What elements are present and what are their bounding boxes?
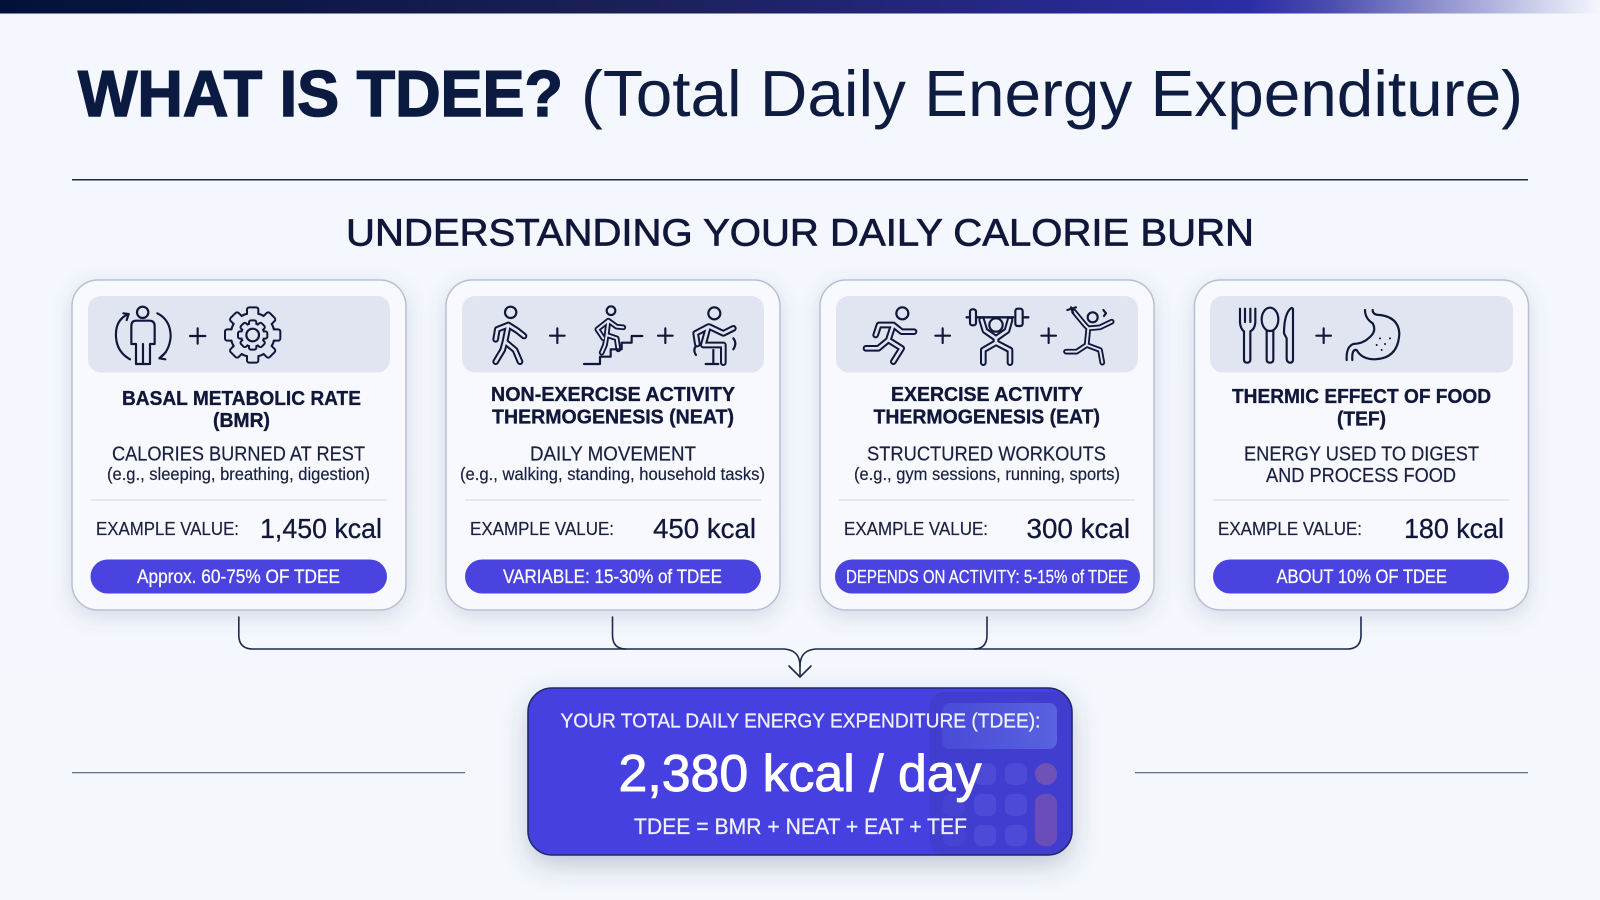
heading: EAT: THERMOGENESIS (EAT) xyxy=(874,406,1100,428)
panel: EAT xyxy=(820,280,1154,610)
panel: TEF xyxy=(1194,280,1528,610)
example value: TEF: EXAMPLE VALUE: xyxy=(1218,519,1362,539)
example value: NEAT: EXAMPLE VALUE: xyxy=(470,519,614,539)
badge: BMR share xyxy=(90,560,387,594)
example value: BMR: 1,450 kcal xyxy=(260,513,382,544)
panel: NEAT xyxy=(446,280,780,610)
heading: NEAT xyxy=(491,383,735,428)
example value: TEF: 180 kcal xyxy=(1404,513,1504,544)
description: NEAT xyxy=(460,444,765,484)
panel: TDEE total xyxy=(528,688,1072,855)
example value: BMR xyxy=(96,513,382,544)
icon: running, weightlifting and jumping xyxy=(866,307,1112,363)
badge: NEAT share xyxy=(465,560,761,594)
title: (Total Daily Energy Expenditure) xyxy=(581,57,1523,130)
description: NEAT: DAILY MOVEMENT xyxy=(530,444,696,466)
description: BMR: (e.g., sleeping, breathing, digestion) xyxy=(107,464,370,484)
arrow: connector merging cards into total xyxy=(239,617,1361,677)
badge: EAT share xyxy=(835,560,1140,594)
description: NEAT: (e.g., walking, standing, household tasks) xyxy=(460,464,765,484)
example value: EAT: 300 kcal xyxy=(1026,513,1130,544)
description: EAT xyxy=(854,444,1120,484)
description: EAT: (e.g., gym sessions, running, sports) xyxy=(854,464,1120,484)
heading: NEAT: THERMOGENESIS (NEAT) xyxy=(492,406,734,428)
example value: NEAT xyxy=(470,513,756,544)
panel: BMR xyxy=(72,280,406,610)
description: BMR: CALORIES BURNED AT REST xyxy=(112,444,365,466)
heading: BMR: (BMR) xyxy=(213,409,270,432)
badge: EAT share: DEPENDS ON ACTIVITY: 5-15% of TDEE xyxy=(846,567,1128,587)
description: TEF: AND PROCESS FOOD xyxy=(1266,465,1456,487)
title xyxy=(78,57,1523,130)
heading: NEAT: NON-EXERCISE ACTIVITY xyxy=(491,383,735,406)
description: EAT: STRUCTURED WORKOUTS xyxy=(867,444,1106,466)
badge: BMR share: Approx. 60-75% OF TDEE xyxy=(137,566,340,588)
formula: TDEE = BMR + NEAT + EAT + TEF xyxy=(634,814,967,839)
example value: EAT xyxy=(844,513,1130,544)
heading: BMR: BASAL METABOLIC RATE xyxy=(122,387,361,410)
example value: NEAT: 450 kcal xyxy=(653,513,756,544)
heading: BMR xyxy=(122,387,361,432)
icon: walking, stairs and standing up xyxy=(496,306,735,364)
heading: TEF: THERMIC EFFECT OF FOOD xyxy=(1232,385,1491,408)
icon: faded calculator xyxy=(930,692,1072,855)
heading: TEF: (TEF) xyxy=(1337,408,1386,430)
total value: 2,380 kcal / day xyxy=(618,745,982,803)
description: TEF xyxy=(1244,444,1479,487)
badge: TEF share: ABOUT 10% OF TDEE xyxy=(1276,566,1447,588)
example value: TEF xyxy=(1218,513,1504,544)
badge: TEF share xyxy=(1213,560,1509,594)
heading: EAT xyxy=(874,383,1100,428)
badge: NEAT share: VARIABLE: 15-30% of TDEE xyxy=(503,566,722,588)
description: TEF: ENERGY USED TO DIGEST xyxy=(1244,444,1479,466)
example value: BMR: EXAMPLE VALUE: xyxy=(96,519,239,539)
top gradient bar xyxy=(0,0,1600,14)
heading: EAT: EXERCISE ACTIVITY xyxy=(891,383,1083,406)
description: BMR xyxy=(107,444,370,484)
icon: person and metabolism xyxy=(116,307,279,364)
subtitle: UNDERSTANDING YOUR DAILY CALORIE BURN xyxy=(346,212,1254,254)
heading: TEF xyxy=(1232,385,1491,430)
total label: YOUR TOTAL DAILY ENERGY EXPENDITURE (TDEE): xyxy=(560,710,1040,732)
title: WHAT IS TDEE? xyxy=(78,57,563,130)
icon: cutlery and stomach xyxy=(1240,308,1399,363)
example value: EAT: EXAMPLE VALUE: xyxy=(844,519,988,539)
